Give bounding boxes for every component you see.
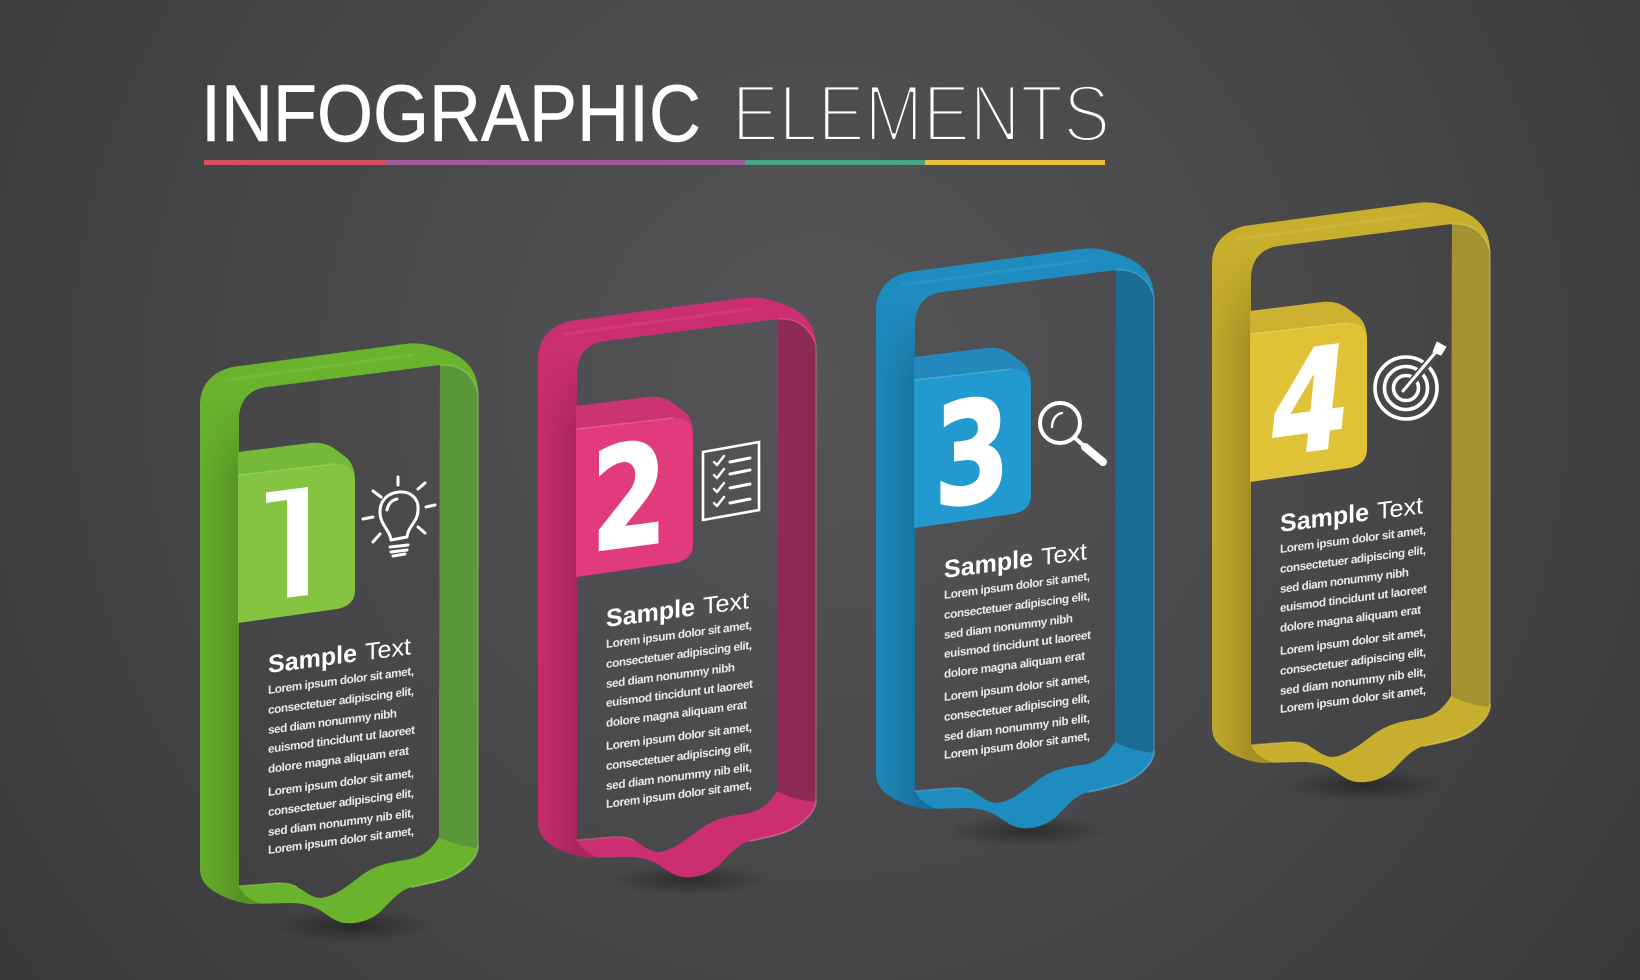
- text block: Text: [1041, 538, 1087, 571]
- text block: Lorem ipsum dolor sit amet,: [944, 729, 1090, 762]
- number tab: [576, 397, 693, 577]
- text block: dolore magna aliquam erat: [606, 697, 747, 730]
- text block: Lorem ipsum dolor sit amet,: [944, 569, 1090, 602]
- text block: euismod tincidunt ut laoreet: [1280, 582, 1427, 615]
- frame: [538, 297, 816, 877]
- text block: [944, 537, 1091, 762]
- title: ELEMENTS: [732, 69, 1110, 159]
- text block: Lorem ipsum dolor sit amet,: [1280, 683, 1426, 716]
- text block: dolore magna aliquam erat: [268, 743, 409, 776]
- text block: sed diam nonummy nib elit,: [944, 711, 1090, 744]
- text block: dolore magna aliquam erat: [1280, 602, 1421, 635]
- title: INFOGRAPHIC: [201, 69, 701, 159]
- text block: sed diam nonummy nib elit,: [1280, 665, 1426, 698]
- icon: magnifier: [1040, 403, 1103, 462]
- number tab: [1250, 302, 1367, 482]
- icon: light bulb: [363, 477, 435, 556]
- text block: consectetuer adipiscing elit,: [606, 638, 752, 671]
- icon: checklist: [703, 442, 759, 520]
- text block: Lorem ipsum dolor sit amet,: [268, 664, 414, 697]
- text block: Lorem ipsum dolor sit amet,: [1280, 523, 1426, 556]
- text block: Sample: [606, 593, 695, 633]
- text block: Text: [703, 587, 749, 620]
- text block: sed diam nonummy nib elit,: [606, 760, 752, 793]
- text block: Sample: [944, 544, 1033, 584]
- text block: euismod tincidunt ut laoreet: [606, 677, 753, 710]
- text block: dolore magna aliquam erat: [944, 648, 1085, 681]
- numeral 1: 1: [247, 458, 330, 636]
- text block: Lorem ipsum dolor sit amet,: [944, 671, 1090, 704]
- text block: euismod tincidunt ut laoreet: [268, 723, 415, 756]
- text block: consectetuer adipiscing elit,: [268, 684, 414, 717]
- text block: consectetuer adipiscing elit,: [268, 786, 414, 819]
- text block: consectetuer adipiscing elit,: [1280, 543, 1426, 576]
- title underline: four colour bar: [204, 160, 1105, 165]
- text block: Text: [365, 633, 411, 666]
- text block: Lorem ipsum dolor sit amet,: [606, 618, 752, 651]
- panel: step 2 pink: [538, 297, 816, 896]
- frame: [200, 343, 478, 923]
- text block: [606, 586, 753, 811]
- numeral 2: 2: [591, 411, 667, 584]
- text block: consectetuer adipiscing elit,: [1280, 645, 1426, 678]
- text block: sed diam nonummy nib elit,: [268, 806, 414, 839]
- text block: consectetuer adipiscing elit,: [606, 740, 752, 773]
- frame: [1212, 202, 1490, 782]
- text block: Lorem ipsum dolor sit amet,: [606, 720, 752, 753]
- text block: Lorem ipsum dolor sit amet,: [606, 778, 752, 811]
- shadow: [610, 864, 770, 896]
- number tab: [238, 443, 355, 623]
- shadow: [1284, 769, 1444, 801]
- text block: Sample: [1280, 498, 1369, 538]
- number tab: [914, 348, 1031, 528]
- text block: consectetuer adipiscing elit,: [944, 589, 1090, 622]
- text block: Text: [1377, 492, 1423, 525]
- frame: [876, 248, 1154, 828]
- text block: consectetuer adipiscing elit,: [944, 691, 1090, 724]
- text block: Lorem ipsum dolor sit amet,: [268, 824, 414, 857]
- text block: [1280, 491, 1427, 716]
- panel: step 1 green: [200, 343, 478, 942]
- numeral 3: 3: [934, 367, 1010, 540]
- shadow: [272, 910, 432, 942]
- title: [201, 69, 1110, 159]
- text block: sed diam nonummy nibh: [944, 611, 1073, 642]
- text block: sed diam nonummy nibh: [606, 660, 735, 691]
- panel: step 3 blue: [876, 248, 1154, 847]
- panel: step 4 yellow: [1212, 202, 1490, 801]
- text block: Lorem ipsum dolor sit amet,: [268, 766, 414, 799]
- numeral 4: 4: [1263, 316, 1357, 490]
- text block: sed diam nonummy nibh: [268, 706, 397, 737]
- text block: [268, 632, 415, 857]
- icon: target: [1375, 342, 1446, 419]
- text block: sed diam nonummy nibh: [1280, 565, 1409, 596]
- text block: euismod tincidunt ut laoreet: [944, 628, 1091, 661]
- shadow: [948, 815, 1108, 847]
- text block: Lorem ipsum dolor sit amet,: [1280, 625, 1426, 658]
- text block: Sample: [268, 639, 357, 679]
